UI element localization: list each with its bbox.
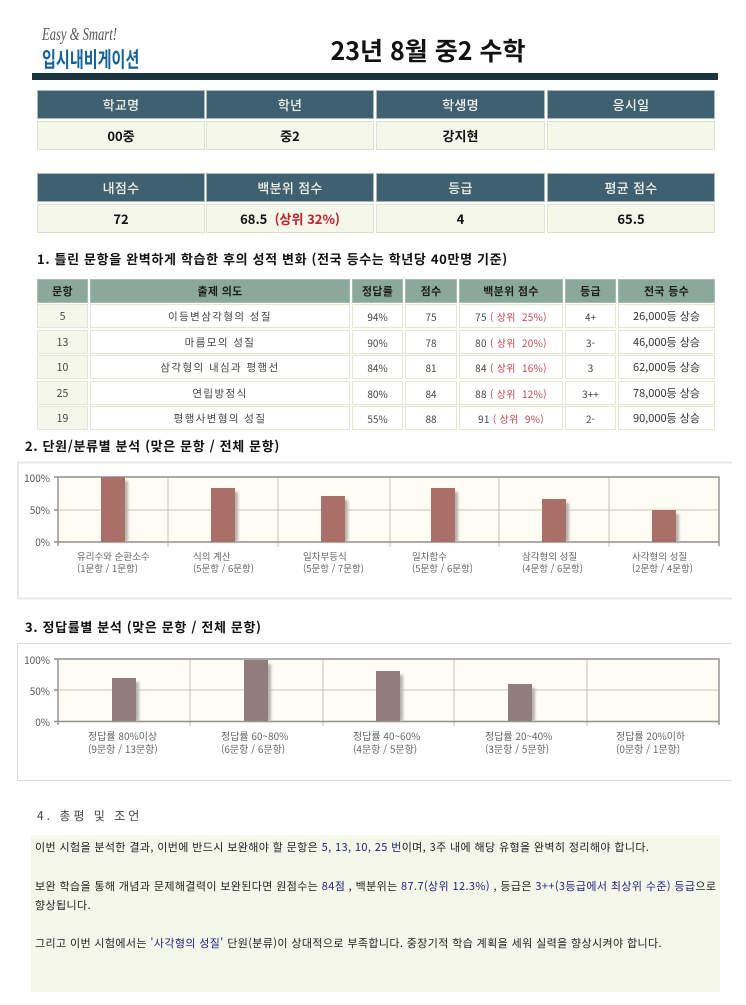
row: question 25: 78,000등 상승 [633,385,700,401]
row: question 25: 25 [57,386,68,400]
table: score change [37,279,715,430]
row: question 19: 평행사변형의 성질 [174,410,266,426]
row: question 19 [37,406,715,430]
row: question 25: 80% [367,386,388,400]
bars [112,660,535,721]
panel: advice [31,835,720,992]
category labels: (5문항 / 6문항) [193,561,254,575]
header: student: 학생명 [442,95,479,114]
value: grade: 중2 [280,126,300,145]
header: student [376,90,545,119]
header: average: 평균 점수 [604,178,657,197]
header: level [376,173,545,202]
row: question 25 [37,381,715,405]
row: question 13: 3- [586,334,595,350]
row: question 13: 80 ( 상위 20%) [475,334,547,350]
y axis labels [24,652,50,729]
row: question 13: 78 [425,334,437,350]
column headers: 정답률 [362,283,393,299]
value: my score: 72 [113,209,129,228]
row: question 10: 81 [425,360,437,374]
advice paragraph 2: 보완 학습을 통해 개념과 문제해결력이 보완된다면 원점수는 84점 , 백분위는 87.7(상위 12.3%) , 등급은 3++(3등급에서 최상위 수준) 등급으로 [35,878,716,894]
row: question 5: 75 [425,308,437,324]
row: question 5: 26,000등 상승 [633,308,700,324]
advice paragraph 2: 향상됩니다. [35,897,91,913]
table: score summary [37,173,715,233]
heading: section 4: 4. 총평 및 조언 [37,807,142,824]
category labels: 유리수와 순환소수 [77,549,150,563]
category labels: 정답률 40~60% [353,728,420,743]
category labels: (5문항 / 7문항) [303,561,364,575]
heading: section 2: 2. 단원/분류별 분석 (맞은 문항 / 전체 문항) [25,436,280,455]
row: question 5: 이등변삼각형의 성질 [168,308,272,324]
table: student info [37,90,715,150]
header: school: 학교명 [103,95,139,114]
header: school [37,90,205,119]
y axis labels: 50% [30,683,50,698]
row: question 10: 10 [57,360,68,374]
title: 23년 8월 중2 수학 [330,32,526,68]
category labels: (0문항 / 1문항) [616,741,680,756]
category labels: (4문항 / 6문항) [522,561,583,575]
advice paragraph 3: 그리고 이번 시험에서는 '사각형의 성질' 단원(분류)이 상대적으로 부족합니다. 중장기적 학습 계획을 세워 실력을 향상시켜야 합니다. [35,935,662,951]
y axis labels: 0% [35,714,50,729]
value: grade [206,121,374,150]
header: my score: 내점수 [103,178,139,197]
row: question 10: 3 [588,360,593,374]
category labels: 사각형의 성질 [632,549,687,563]
panel frame [18,644,732,780]
plot area [54,659,719,726]
row: question 13: 13 [57,334,68,350]
row: question 10: 62,000등 상승 [633,359,700,375]
row: question 25: 88 ( 상위 12%) [475,386,547,400]
row: question 10: 84 ( 상위 16%) [475,360,547,374]
logo [42,24,139,74]
advice paragraph 1: 이번 시험을 분석한 결과, 이번에 반드시 보완해야 할 문항은 5, 13, 10, 25 번이며, 3주 내에 해당 유형을 완벽히 정리해야 합니다. [35,839,649,855]
row: question 13: 46,000등 상승 [633,334,700,350]
category labels [77,549,693,575]
header: level: 등급 [448,178,473,197]
category labels: (1문항 / 1문항) [77,561,138,575]
y axis labels [24,470,50,549]
chart: correct rate analysis [17,643,732,781]
row: question 19: 55% [367,410,388,426]
category labels: (6문항 / 6문항) [221,741,285,756]
header: percentile [206,173,374,202]
category labels: 정답률 20~40% [485,728,552,743]
value: school [37,121,205,150]
value: percentile [206,204,374,233]
row: question 13: 마름모의 성질 [185,334,255,350]
y axis labels: 100% [24,470,50,485]
column headers: 등급 [580,283,601,299]
row: question 13: 90% [367,334,388,350]
row: question 25: 연립방정식 [192,386,248,400]
header: grade: 학년 [278,95,302,114]
panel frame [18,462,732,598]
value: school: 00중 [107,126,135,145]
header: grade [206,90,374,119]
row: question 5: 5 [60,308,65,324]
row: question 5: 75 ( 상위 25%) [475,308,547,324]
column headers: 전국 등수 [644,283,689,299]
category labels: (3문항 / 5문항) [485,741,549,756]
row: question 5: 94% [367,308,388,324]
value: date [547,121,715,150]
row: question 25: 84 [425,386,437,400]
value: student: 강지현 [443,126,478,145]
row: question 19: 91 ( 상위 9%) [478,410,544,426]
category labels: 정답률 20%이하 [616,728,685,743]
logo slogan: Easy & Smart! [42,24,117,44]
chart: unit analysis [17,462,732,600]
header rule [32,73,718,80]
category labels: (4문항 / 5문항) [353,741,417,756]
header: date [547,90,715,119]
y axis labels: 0% [35,534,50,549]
value: level: 4 [457,209,464,228]
category labels [88,728,685,756]
column headers: 출제 의도 [197,283,243,299]
header: date: 응시일 [613,95,649,114]
row: question 5: 4+ [585,308,596,324]
heading: section 1: 1. 틀린 문항을 완벽하게 학습한 후의 성적 변화 (전국 등수는 학년당 40만명 기준) [37,249,508,268]
row: question 10 [37,355,715,379]
value: level [376,204,545,233]
row: question 25: 3++ [582,386,599,400]
category labels: 삼각형의 성질 [522,549,577,563]
logo wordmark: 입시내비게이션 [42,44,139,74]
category labels: (9문항 / 13문항) [88,741,158,756]
heading: section 3: 3. 정답률별 분석 (맞은 문항 / 전체 문항) [25,617,262,636]
plot area [54,477,719,547]
value: student [376,121,545,150]
column headers: 백분위 점수 [483,283,539,299]
value: average [547,204,715,233]
category labels: (2문항 / 4문항) [632,561,693,575]
category labels: 일차부등식 [303,549,347,563]
row: question 10: 삼각형의 내심과 평행선 [160,360,280,374]
y axis labels: 100% [24,652,50,667]
value: average: 65.5 [617,209,645,228]
row: question 19: 19 [57,410,68,426]
value: percentile: 68.5 (상위 32%) [240,209,340,228]
header: average [547,173,715,202]
row: question 10: 84% [367,360,388,374]
category labels: 정답률 80%이상 [88,728,157,743]
row: question 19: 2- [586,410,595,426]
y axis labels: 50% [30,502,50,517]
row: question 13 [37,330,715,354]
row: question 19: 88 [425,410,437,426]
category labels: 식의 계산 [193,549,231,563]
category labels: 일차함수 [412,549,447,563]
category labels: (5문항 / 6문항) [412,561,473,575]
category labels: 정답률 60~80% [221,728,288,743]
column headers: 점수 [421,283,441,299]
row: question 5 [37,304,715,328]
row: question 19: 90,000등 상승 [633,410,700,426]
bars [101,477,679,542]
header: my score [37,173,205,202]
column headers: 문항 [52,283,73,299]
column headers [37,279,715,303]
advice paragraph 2 [35,878,716,913]
header: percentile: 백분위 점수 [257,178,323,197]
value: my score [37,204,205,233]
